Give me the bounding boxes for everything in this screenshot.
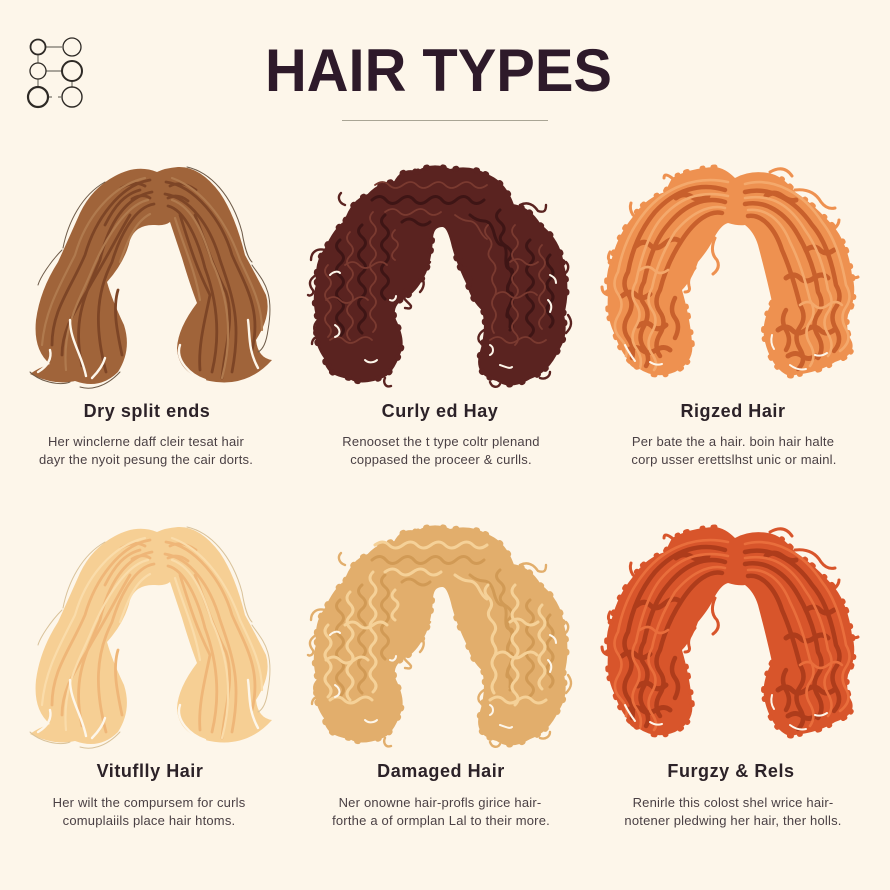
illustration: red wavy hair xyxy=(602,527,858,736)
description: rigzed hair: Per bate the a hair. boin hair halte xyxy=(632,434,834,449)
icon: linked circles logo xyxy=(28,38,82,107)
description: curly ed hay: coppased the proceer & curlls. xyxy=(350,452,532,467)
heading: rigzed hair: Rigzed Hair xyxy=(680,401,786,421)
heading: furgzy and rels: Furgzy & Rels xyxy=(667,761,795,781)
description: dry split ends: dayr the nyoit pesung the cair dorts. xyxy=(39,452,253,467)
illustration: orange wavy hair xyxy=(602,167,858,376)
description: vituflly hair: Her wilt the compursem for curls xyxy=(53,795,246,810)
heading: vituflly hair: Vituflly Hair xyxy=(97,761,203,781)
heading: dry split ends: Dry split ends xyxy=(84,401,210,421)
heading: curly ed hay: Curly ed Hay xyxy=(382,401,498,421)
description: damaged hair: forthe a of ormplan Lal to their more. xyxy=(332,813,550,828)
illustration: golden curly hair xyxy=(308,526,571,747)
description: rigzed hair: corp usser erettslhst unic or mainl. xyxy=(631,452,837,467)
title: HAIR TYPES xyxy=(265,37,612,104)
heading: damaged hair: Damaged Hair xyxy=(377,761,505,781)
panel: curly hair xyxy=(308,166,571,467)
panel: damaged hair xyxy=(308,526,571,828)
illustration: dark curly hair xyxy=(308,166,571,387)
description: furgzy and rels: Renirle this colost shel wrice hair- xyxy=(633,795,833,810)
description: damaged hair: Ner onowne hair-profls girice hair- xyxy=(339,795,541,810)
description: curly ed hay: Renooset the t type coltr plenand xyxy=(342,434,540,449)
panel: vituflly hair xyxy=(30,527,272,828)
illustration: brown wavy hair xyxy=(30,167,272,388)
panel: furgzy and rels xyxy=(602,527,858,828)
illustration: blonde wavy hair xyxy=(30,527,272,748)
description: furgzy and rels: notener pledwing her hair, ther holls. xyxy=(624,813,842,828)
description: vituflly hair: comuplaiils place hair htoms. xyxy=(63,813,235,828)
panel: dry split ends xyxy=(30,167,272,467)
panel: rigzed hair xyxy=(602,167,858,467)
description: dry split ends: Her winclerne daff cleir tesat hair xyxy=(48,434,244,449)
title underline xyxy=(342,120,548,121)
